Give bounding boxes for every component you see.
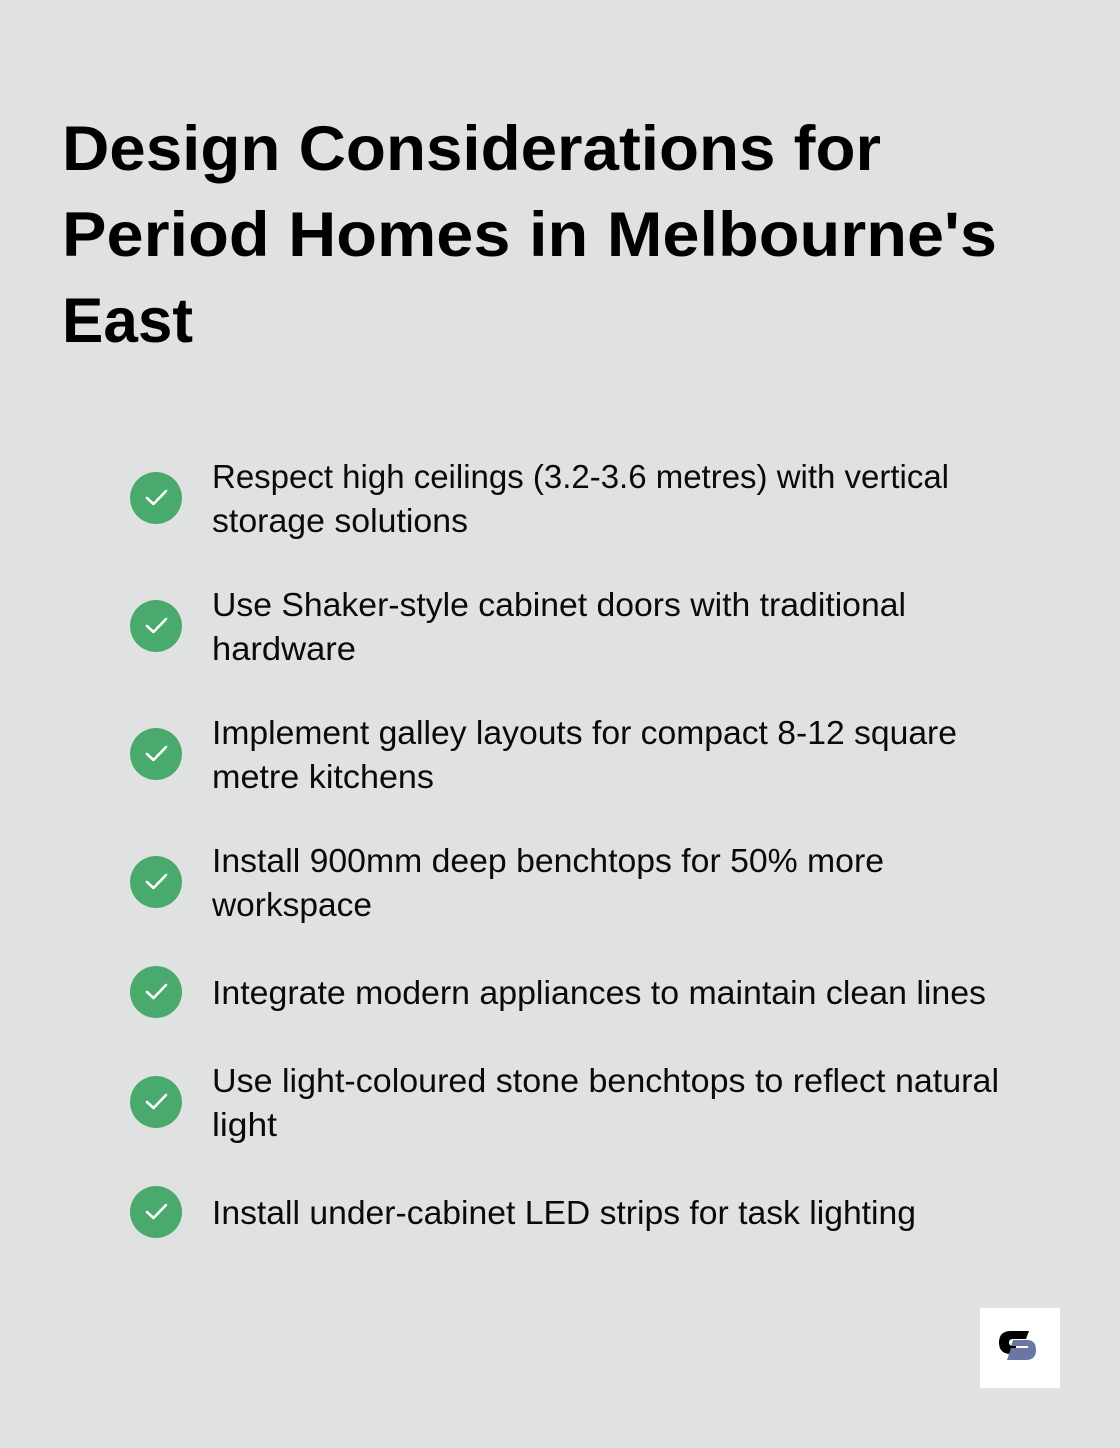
title	[62, 114, 997, 356]
item: Shaker doors: Use Shaker-style cabinet doors with traditional	[212, 586, 906, 623]
item: deep benchtops	[130, 842, 884, 923]
item: stone benchtops	[130, 1062, 999, 1143]
item: Shaker doors: hardware	[212, 630, 356, 667]
item: galley layouts: metre kitchens	[212, 758, 434, 795]
checklist	[130, 458, 999, 1238]
item: stone benchtops: light	[212, 1106, 277, 1143]
title: Period Homes in Melbourne's	[62, 200, 997, 270]
item: deep benchtops: workspace	[211, 886, 372, 923]
item: high ceilings	[130, 458, 949, 539]
item: LED strips: Install under-cabinet LED strips for task lighting	[212, 1194, 916, 1231]
item: high ceilings: storage solutions	[212, 502, 468, 539]
item: stone benchtops: Use light-coloured stone benchtops to reflect natural	[212, 1062, 999, 1099]
item: galley layouts: Implement galley layouts for compact 8-12 square	[212, 714, 957, 751]
item: modern appliances: Integrate modern appliances to maintain clean lines	[212, 974, 986, 1011]
item: deep benchtops: Install 900mm deep benchtops for 50% more	[212, 842, 884, 879]
item: modern appliances	[130, 966, 986, 1018]
logo	[980, 1308, 1060, 1388]
title: East	[62, 286, 193, 356]
item: galley layouts	[130, 714, 957, 795]
item: Shaker doors	[130, 586, 906, 667]
item: LED strips	[130, 1186, 916, 1238]
item: high ceilings: Respect high ceilings (3.2-3.6 metres) with vertical	[212, 458, 949, 495]
title: Design Considerations for	[62, 114, 881, 184]
